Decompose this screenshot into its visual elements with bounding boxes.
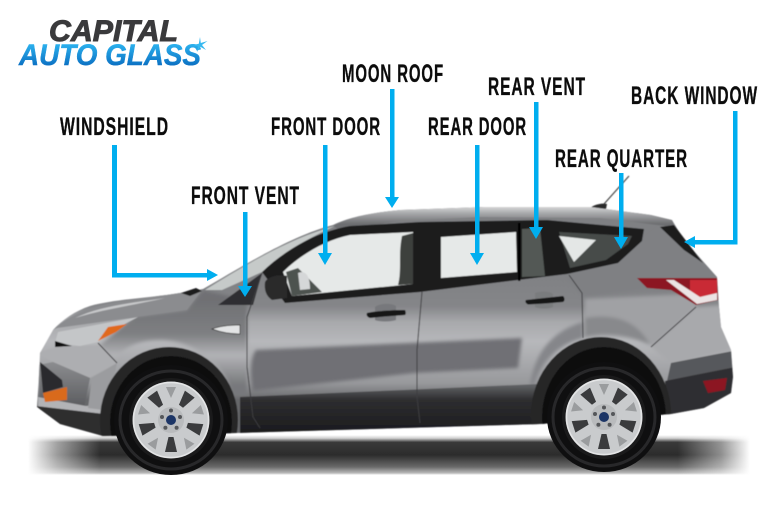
rear window divider	[518, 223, 520, 281]
rear quarter light glass	[559, 236, 596, 262]
back window	[660, 225, 703, 263]
label: rear quarter: REAR QUARTER	[555, 145, 688, 173]
wiper cowl	[181, 288, 202, 296]
label: front door: FRONT DOOR	[271, 113, 381, 141]
front wheel	[114, 365, 228, 475]
arrow: rear vent	[529, 102, 543, 239]
rear door handle	[525, 292, 564, 308]
door seams	[98, 273, 696, 428]
car	[36, 175, 734, 437]
logo word: Capital: CAPITAL	[49, 15, 178, 48]
rear corner panel	[654, 304, 730, 351]
upper rear quarter panel	[560, 225, 720, 297]
label: rear vent: REAR VENT	[488, 73, 586, 101]
door interior	[286, 268, 322, 296]
tail light	[637, 278, 718, 305]
icon: front vent window	[218, 273, 262, 305]
rocker panel	[240, 384, 540, 436]
rear quarter lower panel	[584, 294, 698, 346]
rear quarter arch shade	[585, 317, 650, 345]
rear vent window	[522, 228, 545, 277]
front lower trim	[36, 406, 102, 436]
arrow: back window	[684, 111, 738, 248]
label: moon roof: MOON ROOF	[342, 60, 444, 88]
front bumper middle	[38, 362, 90, 408]
rear door arch shade	[530, 322, 583, 385]
ground shadow	[28, 435, 750, 475]
headlight	[55, 317, 138, 347]
seat silhouette	[398, 233, 413, 285]
front wheel well	[110, 356, 232, 436]
rear bumper band	[667, 351, 735, 381]
front fender	[100, 290, 247, 395]
rear wheel well	[542, 347, 666, 424]
label: windshield: WINDSHIELD	[60, 113, 169, 141]
fender side vent	[212, 325, 240, 334]
front bumper top	[66, 366, 108, 378]
arrow: front vent	[238, 212, 252, 297]
front fender edge toward bumper	[88, 364, 116, 410]
rear wheel	[547, 362, 661, 472]
roof rail highlight	[333, 207, 674, 230]
arrow: rear door	[470, 145, 484, 265]
icon: glass sparkle	[193, 37, 208, 52]
arrow: front door	[318, 145, 332, 265]
windshield	[205, 226, 335, 290]
turn signal	[98, 324, 127, 341]
rear quarter window	[559, 232, 632, 268]
soft body panels	[100, 287, 730, 392]
chrome mirror back	[298, 272, 310, 290]
rear lower bumper	[665, 367, 735, 416]
tail light white stripe	[666, 280, 717, 304]
window surround	[262, 220, 644, 303]
rear wheel arch	[532, 336, 671, 425]
front bumper lip	[38, 397, 104, 414]
dark door panel recess	[251, 338, 522, 391]
label: front vent: FRONT VENT	[191, 182, 300, 210]
arrow: moon roof	[385, 89, 399, 208]
logo word: Auto Glass: AUTO GLASS	[18, 39, 201, 72]
hood	[53, 289, 203, 330]
arrow: rear quarter	[614, 173, 628, 249]
fog lamp	[43, 387, 67, 402]
tail light lens	[690, 280, 717, 303]
rear door window	[441, 232, 517, 278]
front door window	[283, 232, 413, 296]
rear reflector	[703, 378, 727, 393]
arrow: windshield	[112, 145, 218, 281]
hood crest highlight	[75, 298, 165, 318]
front grille	[40, 362, 63, 393]
front door handle	[367, 304, 406, 322]
front wheel arch	[100, 346, 238, 437]
label: rear door: REAR DOOR	[428, 113, 527, 141]
car body	[36, 206, 734, 437]
logo: Capital Auto Glass	[18, 15, 207, 72]
antenna	[590, 176, 629, 209]
side mirror	[265, 275, 287, 300]
